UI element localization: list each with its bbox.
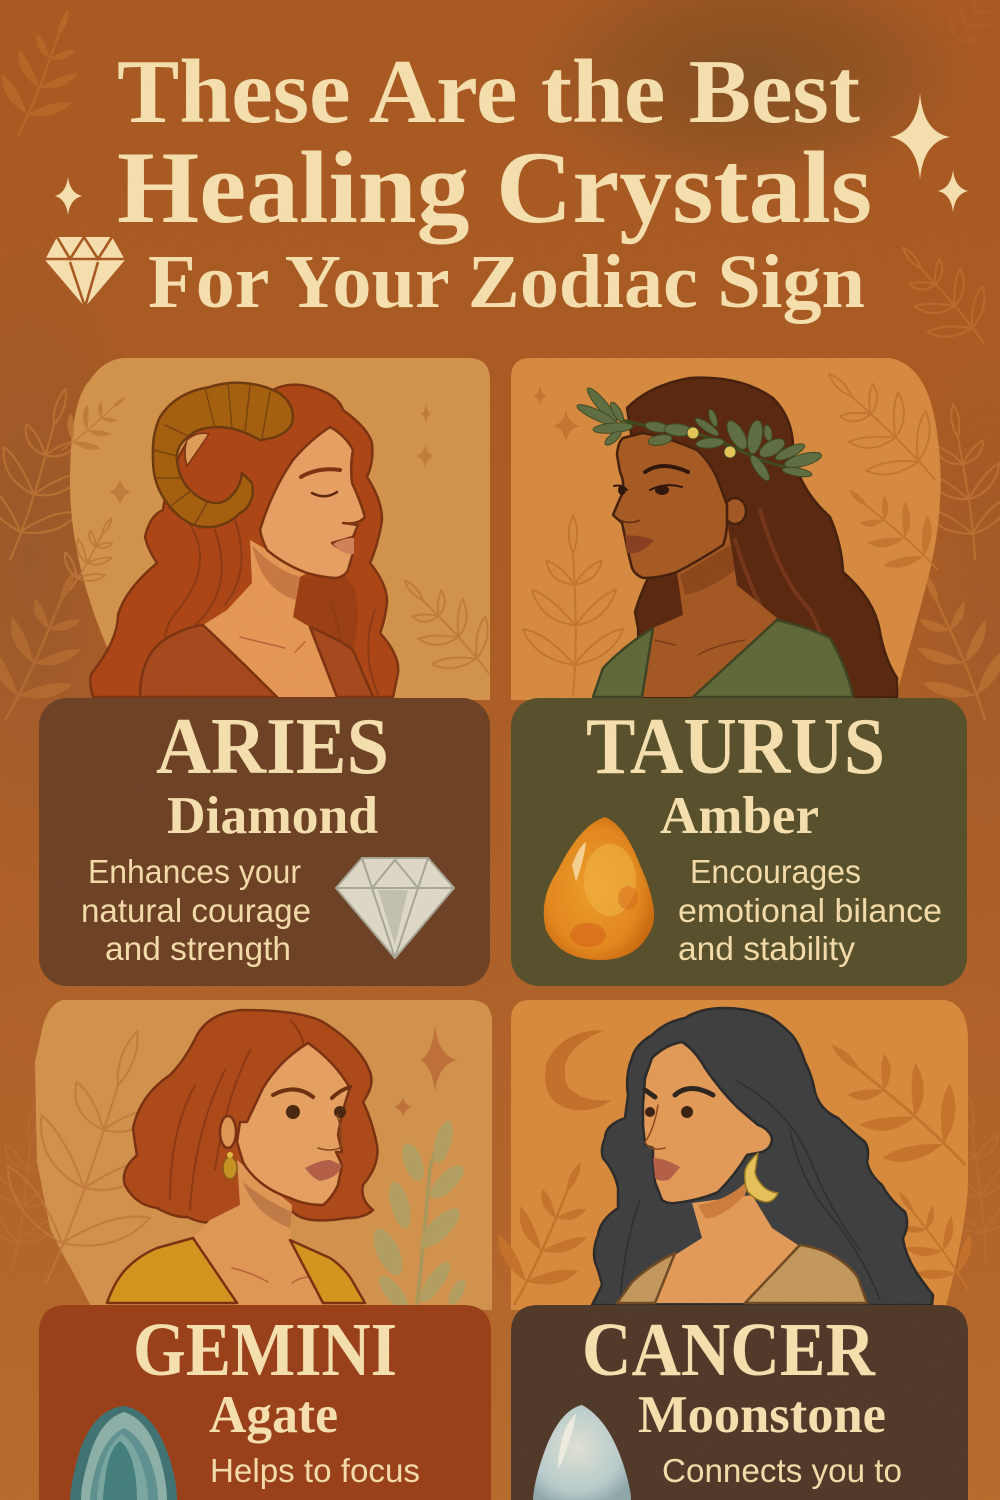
Aries crystal name: Diamond [167,787,378,845]
Taurus figure [593,378,897,697]
Aries description [81,853,311,967]
Gemini background foliage and stars [0,1005,457,1311]
icon: moonstone crystal [533,1405,631,1500]
Cancer heading: CANCER [582,1308,876,1392]
icon: diamond crystal [336,858,454,958]
Taurus background foliage and stars [523,344,965,695]
Gemini portrait background [35,1000,492,1310]
panel: Cancer [474,1000,999,1324]
panel: Gemini [0,1000,492,1312]
panel: Aries [47,358,517,700]
card: Gemini [39,1305,491,1500]
title: These Are the Best [117,41,860,142]
Aries heading: ARIES [156,701,389,791]
Taurus description: emotional bilance [678,892,942,929]
Cancer portrait background [511,1000,968,1310]
Taurus portrait background [511,358,941,700]
Gemini heading: GEMINI [133,1308,397,1392]
Taurus heading: TAURUS [586,701,885,791]
Gemini foliage green [367,1119,469,1312]
Taurus crystal name: Amber [660,787,819,845]
Cancer figure [592,1008,933,1305]
Aries background foliage and stars [47,379,517,699]
icon: title diamond [45,237,125,307]
Aries figure [90,383,398,697]
Taurus description: and stability [678,930,856,967]
Taurus description [678,853,942,967]
Cancer description: Connects you to [662,1452,902,1489]
icon: title sparkles [55,93,968,215]
Aries description: natural courage [81,892,311,929]
Gemini description: Helps to focus [210,1452,420,1489]
title: For Your Zodiac Sign [148,240,865,324]
Cancer background foliage and moon [474,1007,999,1324]
Taurus leaf crown [575,385,823,483]
Gemini figure [107,1010,377,1305]
Taurus description: Encourages [690,853,861,890]
Aries description: Enhances your [88,853,301,890]
card: Taurus [511,698,967,986]
title [117,41,872,324]
panel: Taurus [511,344,965,700]
icon: agate crystal [70,1406,177,1500]
Gemini crystal name: Agate [209,1386,338,1444]
Aries portrait background [70,358,490,700]
card: Aries [39,698,490,986]
Cancer crystal name: Moonstone [638,1386,886,1444]
title: Healing Crystals [117,131,872,245]
card: Cancer [511,1305,968,1500]
Aries description: and strength [105,930,291,967]
icon: amber crystal [544,817,654,960]
